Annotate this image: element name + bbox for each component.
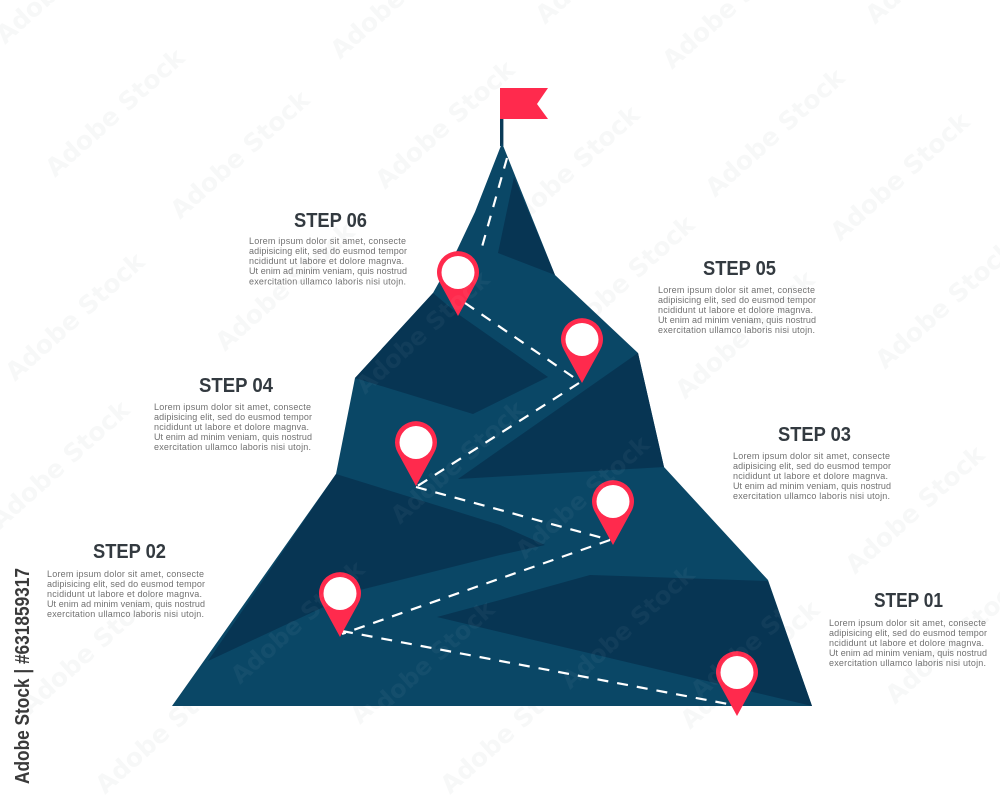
step 05 text block	[658, 258, 816, 335]
step 03 text block: Ut enim ad minim veniam, quis nostrud	[733, 481, 891, 491]
step 03 text block: Lorem ipsum dolor sit amet, consecte	[733, 451, 890, 461]
shadow facet: lower right	[437, 575, 812, 706]
step 04 text block: ncididunt ut labore et dolore magnva.	[154, 422, 309, 432]
watermark pattern background: Adobe Stock	[165, 84, 316, 224]
step 01 text block: Ut enim ad minim veniam, quis nostrud	[829, 648, 987, 658]
step 03 text block: STEP 03	[778, 424, 851, 446]
step 02 text block: ncididunt ut labore et dolore magnva.	[47, 589, 202, 599]
watermark over mountain: Adobe Stock	[555, 560, 701, 694]
watermark pattern background: Adobe Stock	[210, 216, 361, 356]
step 02 text block: exercitation ullamco laboris nisi utojn.	[47, 609, 204, 619]
step 03 text block: ncididunt ut labore et dolore magnva.	[733, 471, 888, 481]
shadow facet: upper left	[355, 293, 548, 414]
pin: step 02	[319, 572, 361, 637]
step 01 text block: STEP 01	[874, 590, 943, 612]
step 01 text block: ncididunt ut labore et dolore magnva.	[829, 638, 984, 648]
shadow facet: upper right	[458, 353, 664, 479]
shadow facet: summit	[498, 177, 555, 275]
mountain body	[172, 143, 812, 706]
step 04 text block: Ut enim ad minim veniam, quis nostrud	[154, 432, 312, 442]
watermark pattern background: Adobe Stock	[670, 264, 821, 404]
step 06 text block: Ut enim ad minim veniam, quis nostrud	[249, 266, 407, 276]
watermark pattern background: Adobe Stock	[840, 439, 991, 579]
watermark pattern background: Adobe Stock	[700, 62, 851, 202]
step 01 text block: Lorem ipsum dolor sit amet, consecte	[829, 618, 986, 628]
step 05 text block: Ut enim ad minim veniam, quis nostrud	[658, 315, 816, 325]
watermark pattern background: Adobe Stock	[550, 209, 701, 349]
mountain	[172, 143, 812, 706]
step 02 text block: Ut enim ad minim veniam, quis nostrud	[47, 599, 205, 609]
watermark over mountain: Adobe Stock	[510, 430, 656, 564]
pin: step 04	[395, 421, 437, 486]
shadow facet: middle left	[208, 474, 545, 661]
step 06 text block: STEP 06	[294, 210, 367, 232]
step 02 text block: adipisicing elit, sed do eusmod tempor	[47, 579, 205, 589]
watermark pattern background: Adobe Stock	[345, 589, 496, 729]
step 02 text block: Lorem ipsum dolor sit amet, consecte	[47, 569, 204, 579]
step 03 text block: adipisicing elit, sed do eusmod tempor	[733, 461, 891, 471]
step 05 text block: STEP 05	[703, 258, 776, 280]
watermark pattern background: Adobe Stock	[90, 659, 241, 799]
dashed route	[342, 158, 728, 704]
step 06 text block: adipisicing elit, sed do eusmod tempor	[249, 246, 407, 256]
watermark over mountain: Adobe Stock	[225, 555, 371, 689]
step 05 text block: Lorem ipsum dolor sit amet, consecte	[658, 285, 815, 295]
watermark pattern background: Adobe Stock	[0, 246, 151, 386]
watermark over mountain: Adobe Stock	[685, 570, 831, 704]
watermark over mountain: Adobe Stock	[350, 265, 496, 399]
watermark over mountain: Adobe Stock	[385, 395, 531, 529]
pin: step 03	[592, 480, 634, 545]
step 03 text block: exercitation ullamco laboris nisi utojn.	[733, 491, 890, 501]
step 02 text block	[47, 541, 205, 619]
watermark pattern background: Adobe Stock	[495, 99, 646, 239]
watermark pattern background: Adobe Stock	[435, 659, 586, 799]
step 06 text block: Lorem ipsum dolor sit amet, consecte	[249, 236, 406, 246]
flag on summit	[500, 88, 548, 146]
step 01 text block	[829, 590, 987, 668]
step 01 text block: exercitation ullamco laboris nisi utojn.	[829, 658, 986, 668]
step 01 text block: adipisicing elit, sed do eusmod tempor	[829, 628, 987, 638]
step 03 text block	[733, 424, 891, 501]
pin: step 06	[437, 251, 479, 316]
step 04 text block: Lorem ipsum dolor sit amet, consecte	[154, 402, 311, 412]
watermark pattern background: Adobe Stock	[825, 106, 976, 246]
watermark pattern background: Adobe Stock	[15, 579, 166, 719]
step 06 text block	[249, 210, 407, 286]
watermark over mountain: Adobe Stock	[355, 595, 501, 729]
step 02 text block: STEP 02	[93, 541, 166, 563]
step 06 text block: exercitation ullamco laboris nisi utojn.	[249, 276, 406, 286]
step 04 text block: STEP 04	[199, 375, 274, 397]
step 05 text block: exercitation ullamco laboris nisi utojn.	[658, 325, 815, 335]
step 05 text block: ncididunt ut labore et dolore magnva.	[658, 305, 813, 315]
watermark over mountain	[225, 265, 831, 729]
pin: step 01	[716, 651, 758, 716]
pin: step 05	[561, 318, 603, 383]
watermark pattern background: Adobe Stock	[370, 54, 521, 194]
step 04 text block: exercitation ullamco laboris nisi utojn.	[154, 442, 311, 452]
step 06 text block: ncididunt ut labore et dolore magnva.	[249, 256, 404, 266]
watermark pattern background: Adobe Stock	[675, 594, 826, 734]
step 04 text block	[154, 375, 312, 452]
watermark pattern background: Adobe Stock	[40, 42, 191, 182]
step 04 text block: adipisicing elit, sed do eusmod tempor	[154, 412, 312, 422]
stock id label: Adobe Stock | #631859317	[12, 568, 34, 784]
step 05 text block: adipisicing elit, sed do eusmod tempor	[658, 295, 816, 305]
